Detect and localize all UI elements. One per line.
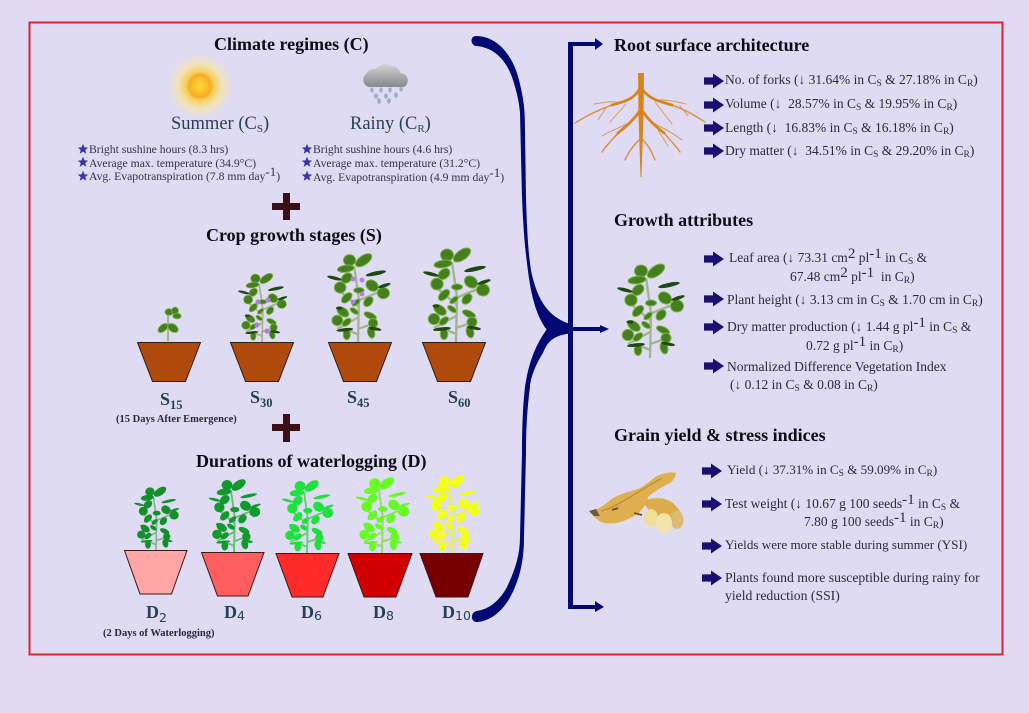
list: root results: S — [876, 79, 882, 89]
label D10: 10 — [455, 608, 471, 623]
note: days of waterlogging: (2 Days of Waterlogging) — [103, 628, 215, 639]
label D4: 4 — [237, 608, 245, 623]
label D8: D — [373, 602, 386, 622]
label S30: S — [250, 387, 260, 407]
list: yield results: in C — [915, 496, 941, 511]
list: growth results: R — [972, 299, 979, 309]
label: rainy: ) — [425, 114, 431, 134]
list: growth results: Plant height (↓ 3.13 cm in C — [727, 292, 880, 307]
list: growth results: Dry matter production (↓ 1.44 g pl — [727, 319, 913, 334]
bracket with three arrows — [568, 38, 609, 612]
list: yield results: Yield (↓ 37.31% in C — [727, 462, 839, 477]
list: growth results: & — [913, 250, 928, 265]
label D2: 2 — [159, 610, 167, 625]
list: yield results: -1 — [894, 510, 906, 526]
list: yield results: yield reduction (SSI) — [725, 588, 840, 604]
label D6: 6 — [314, 608, 322, 623]
list: yield results — [702, 462, 980, 604]
list: root results — [704, 72, 978, 160]
icon: root — [575, 73, 705, 177]
label S60: 60 — [458, 396, 471, 410]
panel: durations of waterlogging — [103, 451, 483, 639]
list: root results: S — [873, 150, 878, 160]
label S45: S — [347, 387, 357, 407]
list: growth results: 0.72 g pl — [806, 338, 854, 353]
list: root results: ) — [953, 96, 957, 111]
plant and pot D10 — [420, 474, 483, 597]
list: root results: S — [852, 127, 858, 137]
panel: root surface architecture — [575, 35, 978, 177]
list: yield results: S — [941, 503, 946, 513]
list: root results: Dry matter (↓ 34.51% in C — [725, 143, 873, 158]
list: growth results: & — [957, 319, 972, 334]
heading: crop growth stages: Crop growth stages (S) — [206, 225, 382, 246]
list: yield results: ) — [933, 462, 937, 477]
list: growth results: in C — [874, 269, 904, 284]
list: rainy climate: -1 — [489, 165, 500, 180]
list: root results: No. of forks (↓ 31.64% in C — [725, 72, 876, 87]
label: rainy: Rainy (C — [350, 114, 417, 134]
list: root results: R — [967, 79, 974, 89]
list: growth results: ) — [910, 269, 915, 284]
plant and pot S15 — [138, 307, 200, 382]
list: growth results: in C — [882, 250, 908, 265]
list: root results: & 16.18% in C — [858, 120, 943, 135]
list: growth results: -1 — [869, 246, 882, 262]
icon: rain cloud — [363, 64, 408, 104]
plant and pot D6 — [276, 478, 339, 597]
icon: plus — [272, 414, 300, 442]
list: root results: Volume (↓ 28.57% in C — [725, 96, 856, 111]
list: root results: R — [946, 103, 953, 113]
list: growth results: S — [908, 257, 913, 267]
heading: root surface architecture: Root surface architecture — [614, 35, 809, 55]
list: growth results: ) — [978, 292, 983, 307]
list: growth results: Normalized Difference Vegetation Index — [727, 359, 947, 374]
list: growth results: S — [795, 384, 800, 394]
list: yield results: R — [927, 469, 934, 479]
list: growth results: 2 — [848, 246, 855, 262]
list: root results: & 19.95% in C — [861, 96, 946, 111]
heading: growth attributes: Growth attributes — [614, 210, 753, 230]
list: yield results: Test weight (↓ 10.67 g 100 seeds — [725, 496, 902, 511]
plant and pot D8 — [348, 476, 412, 597]
list: rainy climate: Average max. temperature (31.2°C) — [313, 157, 480, 170]
plant and pot D2 — [124, 485, 187, 594]
list: growth results: R — [892, 345, 899, 355]
label S15: 15 — [170, 398, 183, 412]
icon: plus — [272, 193, 300, 220]
label D8: 8 — [386, 608, 394, 623]
list: growth results: 67.48 cm — [790, 269, 840, 284]
icon: soybean pods — [589, 472, 684, 533]
label: summer: ) — [263, 114, 269, 134]
heading: grain yield and stress indices: Grain yield & stress indices — [614, 425, 826, 445]
label: rainy: R — [417, 123, 425, 135]
list: root results: ) — [949, 120, 954, 135]
list: root results: R — [964, 150, 971, 160]
panel: climate regimes — [78, 34, 504, 184]
plant and pot S60 — [422, 245, 491, 382]
panel: growth attributes — [614, 210, 983, 394]
list: summer climate: Bright sushine hours (8.3 hrs) — [89, 143, 228, 156]
label: summer: S — [257, 123, 263, 135]
list: summer climate: Average max. temperature (34.9°C) — [89, 157, 256, 170]
label S60: S — [448, 387, 458, 407]
curly brace — [472, 36, 573, 622]
plant and pot S45 — [327, 251, 392, 382]
list: root results: & 29.20% in C — [878, 143, 964, 158]
label S15: S — [160, 389, 170, 409]
list: root results: S — [856, 103, 861, 113]
list: rainy climate — [302, 143, 504, 184]
list: summer climate: -1 — [265, 164, 276, 179]
label D4: D — [224, 602, 237, 622]
list: growth results: pl — [855, 250, 869, 265]
list: root results: R — [943, 127, 950, 137]
list: yield results: ) — [939, 514, 944, 529]
list: yield results: Plants found more susceptible during rainy for — [725, 570, 980, 585]
list: yield results: Yields were more stable during summer (YSI) — [725, 537, 967, 552]
list: root results: Length (↓ 16.83% in C — [725, 120, 852, 135]
list: growth results: pl — [848, 269, 862, 284]
heading: climate regimes: Climate regimes (C) — [214, 34, 369, 55]
list: growth results: -1 — [913, 315, 926, 331]
label D2: D — [146, 602, 159, 622]
list: summer climate — [78, 143, 280, 183]
list: summer climate: ) — [276, 170, 280, 183]
list: growth results: R — [904, 276, 911, 286]
label D10: D — [442, 602, 455, 622]
icon: sun — [167, 53, 233, 119]
list: growth results: 2 — [840, 265, 848, 281]
list: growth results — [704, 246, 983, 394]
list: root results: ) — [970, 143, 974, 158]
list: growth results: -1 — [854, 334, 866, 350]
note: days after emergence: (15 Days After Emergence) — [116, 414, 237, 425]
plant and pot S30 — [230, 271, 294, 382]
panel: crop growth stages — [116, 225, 491, 425]
list: yield results: S — [839, 469, 844, 479]
label S30: 30 — [260, 396, 273, 410]
list: yield results: in C — [906, 514, 933, 529]
list: yield results: & — [946, 496, 961, 511]
list: rainy climate: Bright sushine hours (4.6 hrs) — [313, 143, 452, 156]
plant and pot D4 — [202, 477, 264, 596]
panel: grain yield and stress indices — [589, 425, 980, 604]
heading: durations of waterlogging: Durations of waterlogging (D) — [196, 451, 426, 472]
list: growth results: in C — [866, 338, 892, 353]
list: root results: ) — [973, 72, 978, 87]
list: growth results: S — [952, 326, 957, 336]
list: growth results: & 1.70 cm in C — [885, 292, 972, 307]
list: rainy climate: Avg. Evapotranspiration (4.9 mm day — [313, 171, 489, 184]
list: growth results: Leaf area (↓ 73.31 cm — [729, 250, 848, 265]
list: root results: & 27.18% in C — [882, 72, 967, 87]
list: growth results: ) — [873, 377, 878, 392]
label D6: D — [301, 602, 314, 622]
list: growth results: R — [867, 384, 874, 394]
list: yield results: R — [933, 521, 940, 531]
label: summer: Summer (C — [171, 114, 257, 134]
icon: plant — [617, 261, 685, 358]
list: yield results: 7.80 g 100 seeds — [804, 514, 894, 529]
list: growth results: S — [880, 299, 885, 309]
label S45: 45 — [357, 396, 370, 410]
list: growth results: (↓ 0.12 in C — [730, 377, 795, 392]
list: growth results: in C — [926, 319, 952, 334]
list: growth results: -1 — [862, 265, 874, 281]
list: growth results: & 0.08 in C — [800, 377, 867, 392]
list: summer climate: Avg. Evapotranspiration (7.8 mm day — [89, 170, 265, 183]
list: yield results: & 59.09% in C — [844, 462, 927, 477]
list: yield results: -1 — [902, 492, 915, 508]
list: growth results: ) — [899, 338, 903, 353]
list: rainy climate: ) — [500, 171, 504, 184]
